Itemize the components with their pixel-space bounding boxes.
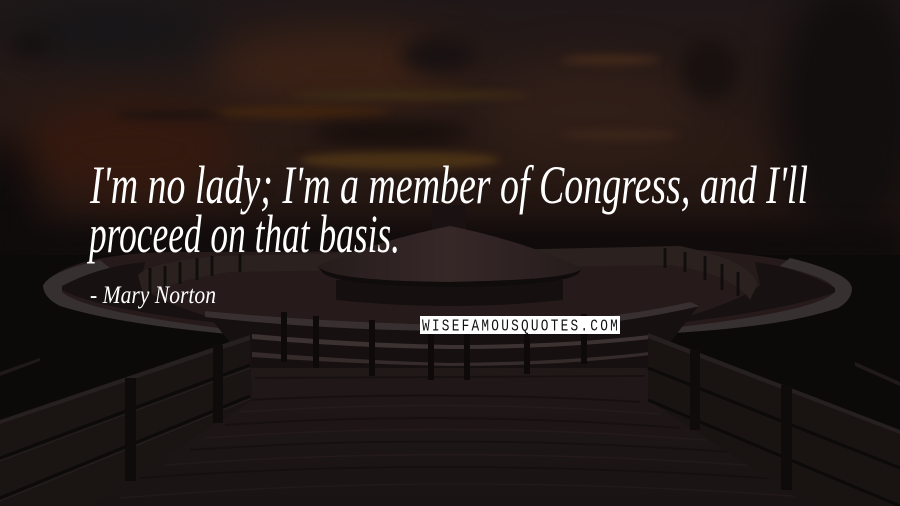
central conical roof pavilion xyxy=(317,205,582,306)
background: dusk sky xyxy=(0,0,900,295)
curved fence around central deck xyxy=(205,302,700,380)
circular walkway and outer railing xyxy=(43,246,852,336)
watermark badge: WISEFAMOUSQUOTES.COM xyxy=(422,316,618,336)
foreground left railing xyxy=(0,335,252,506)
quote text xyxy=(86,155,808,264)
background: dark ground band behind the walkway xyxy=(0,225,900,506)
author attribution: - Mary Norton xyxy=(90,282,216,309)
quote line 2: proceed on that basis. xyxy=(86,204,400,264)
background: wooden deck floor xyxy=(0,355,900,506)
foreground right railing xyxy=(648,333,900,506)
inner far railing xyxy=(138,246,757,300)
